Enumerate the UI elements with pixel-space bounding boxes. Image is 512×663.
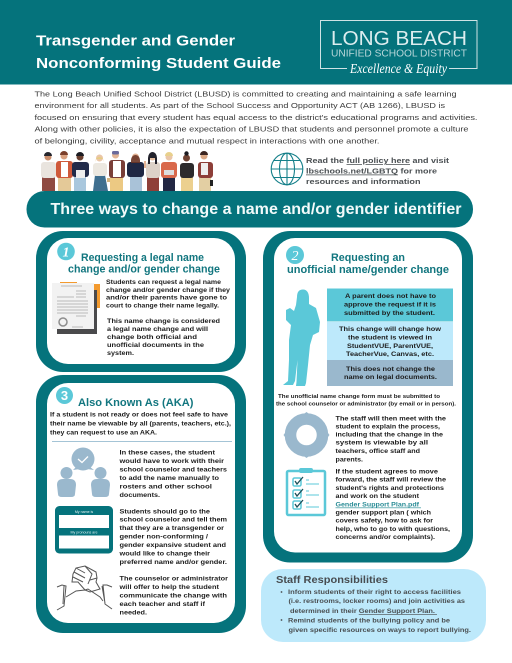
box: parent approval: approve the request if it is xyxy=(344,302,436,308)
box: legal documents xyxy=(327,360,453,386)
intro paragraph: The Long Beach Unified School District (LBUSD) is committed to creating and maintaining a safe learning xyxy=(34,90,456,98)
text: staff meets student: including that the change in the xyxy=(336,432,443,438)
box: legal documents: This does not change the xyxy=(346,366,435,373)
text: counselor helps: communicate the change with xyxy=(120,592,227,600)
heading: legal name change xyxy=(68,252,220,276)
panel 3: also known as xyxy=(36,375,246,633)
icon: two people talking xyxy=(57,448,110,497)
text: work with counselor: would have to work with their xyxy=(118,458,225,465)
header band xyxy=(0,0,512,84)
text: legal name change: system. xyxy=(107,350,134,357)
text: counselor helps xyxy=(118,576,229,616)
bullet list: Remind students of the bullying policy and be xyxy=(288,618,450,624)
text: talk to counselor: that they are a transgender or xyxy=(120,525,225,532)
text: work with counselor: In these cases, the student xyxy=(120,450,216,456)
intro paragraph: focused on ensuring that every student has equal access to the district's educational programs and activities. xyxy=(34,113,477,122)
banner heading xyxy=(26,191,473,228)
text: work with counselor: documents. xyxy=(120,492,160,499)
bullet list: Inform students of their right to access facilities xyxy=(288,589,461,596)
text: talk to counselor: preferred name and/or gender. xyxy=(120,559,227,566)
heading: unofficial name change: unofficial name/gender change xyxy=(287,264,449,276)
text: support plan: gender support plan ( which xyxy=(336,510,431,516)
text: talk to counselor: gender expansive student and xyxy=(120,542,226,549)
text: talk to counselor: school counselor and tell them xyxy=(120,516,227,524)
intro paragraph: environment for all students. As part of the School Success and Opportunity ACT (AB 1266), LBUSD is xyxy=(34,101,445,110)
badge: number 2: 2 xyxy=(292,249,298,264)
intro paragraph: Along with other policies, it is also the expectation of LBUSD that students and personnel promote a culture xyxy=(34,124,468,134)
logo: Long Beach Unified School District: Excellence & Equity xyxy=(349,62,448,77)
icon: globe xyxy=(271,153,303,185)
title: Nonconforming Student Guide xyxy=(36,55,281,72)
text: work with counselor xyxy=(118,450,227,499)
box: parent approval: A parent does not have to xyxy=(345,293,436,300)
panel: staff responsibilities xyxy=(261,569,486,642)
text: legal name change: court to change their name legally. xyxy=(106,302,219,310)
text: legal name change: change and/or gender change if they xyxy=(106,287,230,294)
text: staff meets student: teachers, office staff and xyxy=(336,448,420,455)
box: student systems: StudentVUE, ParentVUE, xyxy=(347,343,433,350)
text: legal name change: unofficial documents in the xyxy=(107,342,204,349)
text: counselor helps: needed. xyxy=(120,610,147,616)
box: legal documents: name on legal documents. xyxy=(344,374,437,381)
box: student systems xyxy=(327,322,453,360)
box: student systems: TeacherVue, Canvas, etc. xyxy=(346,351,434,358)
intro text: AKA: their name be viewable by all (parents, teachers, etc.), xyxy=(50,420,231,428)
icon: checklist clipboard xyxy=(287,468,325,515)
panel 2: unofficial name change xyxy=(263,231,473,562)
icon: name and pronoun tag: My pronouns are xyxy=(71,530,97,534)
text: support plan: student's rights and protections xyxy=(336,485,444,492)
text: support plan: and work on the student xyxy=(336,493,420,500)
policy link text: resources and information xyxy=(306,177,421,186)
icon: student silhouette xyxy=(283,290,320,386)
illustration: group of diverse students xyxy=(41,151,213,191)
text: talk to counselor xyxy=(118,508,227,566)
title: Transgender and Gender xyxy=(36,32,235,50)
text: staff meets student: The staff will then meet with the xyxy=(336,416,446,422)
text: form note: the school counselor or administrator (by email or in person). xyxy=(276,402,456,408)
text: work with counselor: to add the name manually to xyxy=(120,475,219,482)
text: staff meets student: student to explain the process, xyxy=(336,424,440,430)
box: student systems: This change will change how xyxy=(339,326,442,333)
icon: legal document xyxy=(52,282,100,334)
intro text: AKA: they can request to use an AKA. xyxy=(50,430,157,436)
panel 1: legal name change xyxy=(36,231,246,372)
text: form note xyxy=(276,394,456,408)
icon: name and pronoun tag: My name is xyxy=(75,510,93,514)
text: counselor helps: will offer to help the student xyxy=(118,584,220,591)
heading: also known as: Also Known As (AKA) xyxy=(78,397,194,409)
badge: number 2 xyxy=(286,246,304,264)
text: support plan: forward, the staff will review the xyxy=(336,476,446,484)
badge: number 3 xyxy=(56,387,73,404)
text: talk to counselor: gender non-conforming / xyxy=(120,534,208,540)
text: form note: The unofficial name change form must be submitted to xyxy=(278,394,441,400)
heading: legal name change: Requesting a legal name xyxy=(81,252,204,264)
title xyxy=(36,32,281,72)
text: support plan: covers safety, how to ask for xyxy=(336,518,434,524)
banner heading: Three ways to change a name and/or gender identifier xyxy=(50,201,462,218)
heading: legal name change: change and/or gender change xyxy=(68,264,220,276)
text: legal name change: This name change is considered xyxy=(107,318,220,325)
text: staff meets student xyxy=(336,416,446,464)
box: parent approval xyxy=(327,288,453,322)
info boxes xyxy=(327,288,453,386)
bullet list: given specific resources on ways to report bullying. xyxy=(288,627,471,634)
text: counselor helps: each teacher and staff if xyxy=(120,601,206,608)
badge: number 1 xyxy=(57,243,75,260)
logo: Long Beach Unified School District: LONG BEACH xyxy=(331,27,467,50)
text: staff meets student: parents. xyxy=(336,456,363,464)
intro paragraph: of belonging, civility, acceptance and mutual respect in interactions with one another. xyxy=(34,136,380,146)
text: support plan: Gender Support Plan.pdf xyxy=(336,502,421,508)
logo: Long Beach Unified School District xyxy=(320,20,477,77)
policy link text xyxy=(306,156,450,186)
text: talk to counselor: would like to change their xyxy=(118,550,211,558)
icon: clasped hands xyxy=(57,566,112,610)
icon: cycle ring xyxy=(284,412,330,458)
text: counselor helps: The counselor or administrator xyxy=(120,576,229,582)
policy link text: lbschools.net/LGBTQ for more xyxy=(306,166,437,176)
text: legal name change: and/or their parents have gone to xyxy=(106,294,227,302)
intro text: AKA xyxy=(50,412,231,436)
box: parent approval: submitted by the student. xyxy=(344,310,435,317)
badge: number 1: 1 xyxy=(62,246,70,260)
icon: name and pronoun tag xyxy=(55,506,113,554)
bullet list xyxy=(281,589,471,634)
text: support plan: help, who to go to with questions, xyxy=(336,526,450,533)
text: support plan: concerns and/or complaints). xyxy=(336,534,435,541)
policy link text: Read the full policy here and visit xyxy=(306,156,450,165)
box: student systems: the student is viewed in xyxy=(348,334,432,342)
text: legal name change xyxy=(106,279,230,357)
text: legal name change: a legal name change and will xyxy=(107,326,208,333)
heading: unofficial name change: Requesting an xyxy=(331,252,405,264)
badge: number 3: 3 xyxy=(61,388,68,403)
text: staff meets student: system is viewable by all xyxy=(336,440,428,446)
logo: Long Beach Unified School District: UNIFIED SCHOOL DISTRICT xyxy=(331,48,468,60)
bullet list: determined in their Gender Support Plan. xyxy=(290,608,437,615)
text: work with counselor: rosters and other school xyxy=(120,484,212,490)
intro text: AKA: If a student is not ready or does not feel safe to have xyxy=(50,412,228,418)
heading: staff responsibilities: Staff Responsibilities xyxy=(276,574,388,586)
heading: unofficial name change xyxy=(287,252,449,276)
bullet list: (i.e. restrooms, locker rooms) and join activities as xyxy=(288,598,465,605)
text: work with counselor: school counselor and teachers xyxy=(120,466,227,474)
text: support plan: If the student agrees to move xyxy=(336,468,438,476)
text: talk to counselor: Students should go to the xyxy=(120,508,210,516)
intro paragraph xyxy=(34,90,477,146)
text: legal name change: Students can request a legal name xyxy=(106,279,221,286)
text: support plan xyxy=(336,468,450,541)
text: legal name change: change both official and xyxy=(107,334,197,341)
